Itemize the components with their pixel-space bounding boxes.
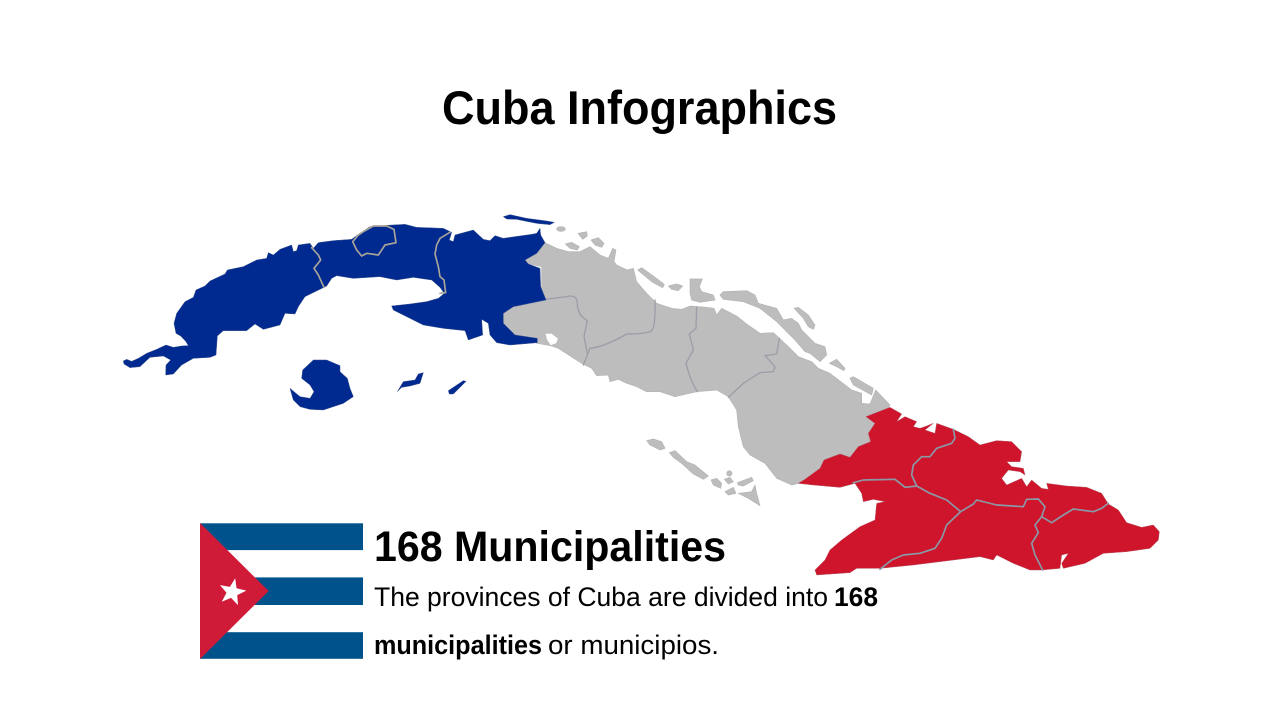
region: western provinces (blue) [123, 215, 554, 410]
text block: description: 168 [834, 582, 878, 612]
text block: description: The provinces of Cuba are divided into [374, 582, 828, 612]
map of Cuba [123, 215, 1159, 575]
text block: description [374, 582, 878, 660]
region: eastern provinces (red) [798, 407, 1159, 575]
region: central provinces (grey) [503, 227, 890, 506]
icon: Cuban flag [200, 523, 363, 659]
text block: description: or municipios. [548, 630, 719, 660]
heading: 168 Municipalities: 168 Municipalities [374, 523, 726, 571]
text block: description: municipalities [374, 630, 542, 660]
title: Cuba Infographics [442, 81, 837, 134]
